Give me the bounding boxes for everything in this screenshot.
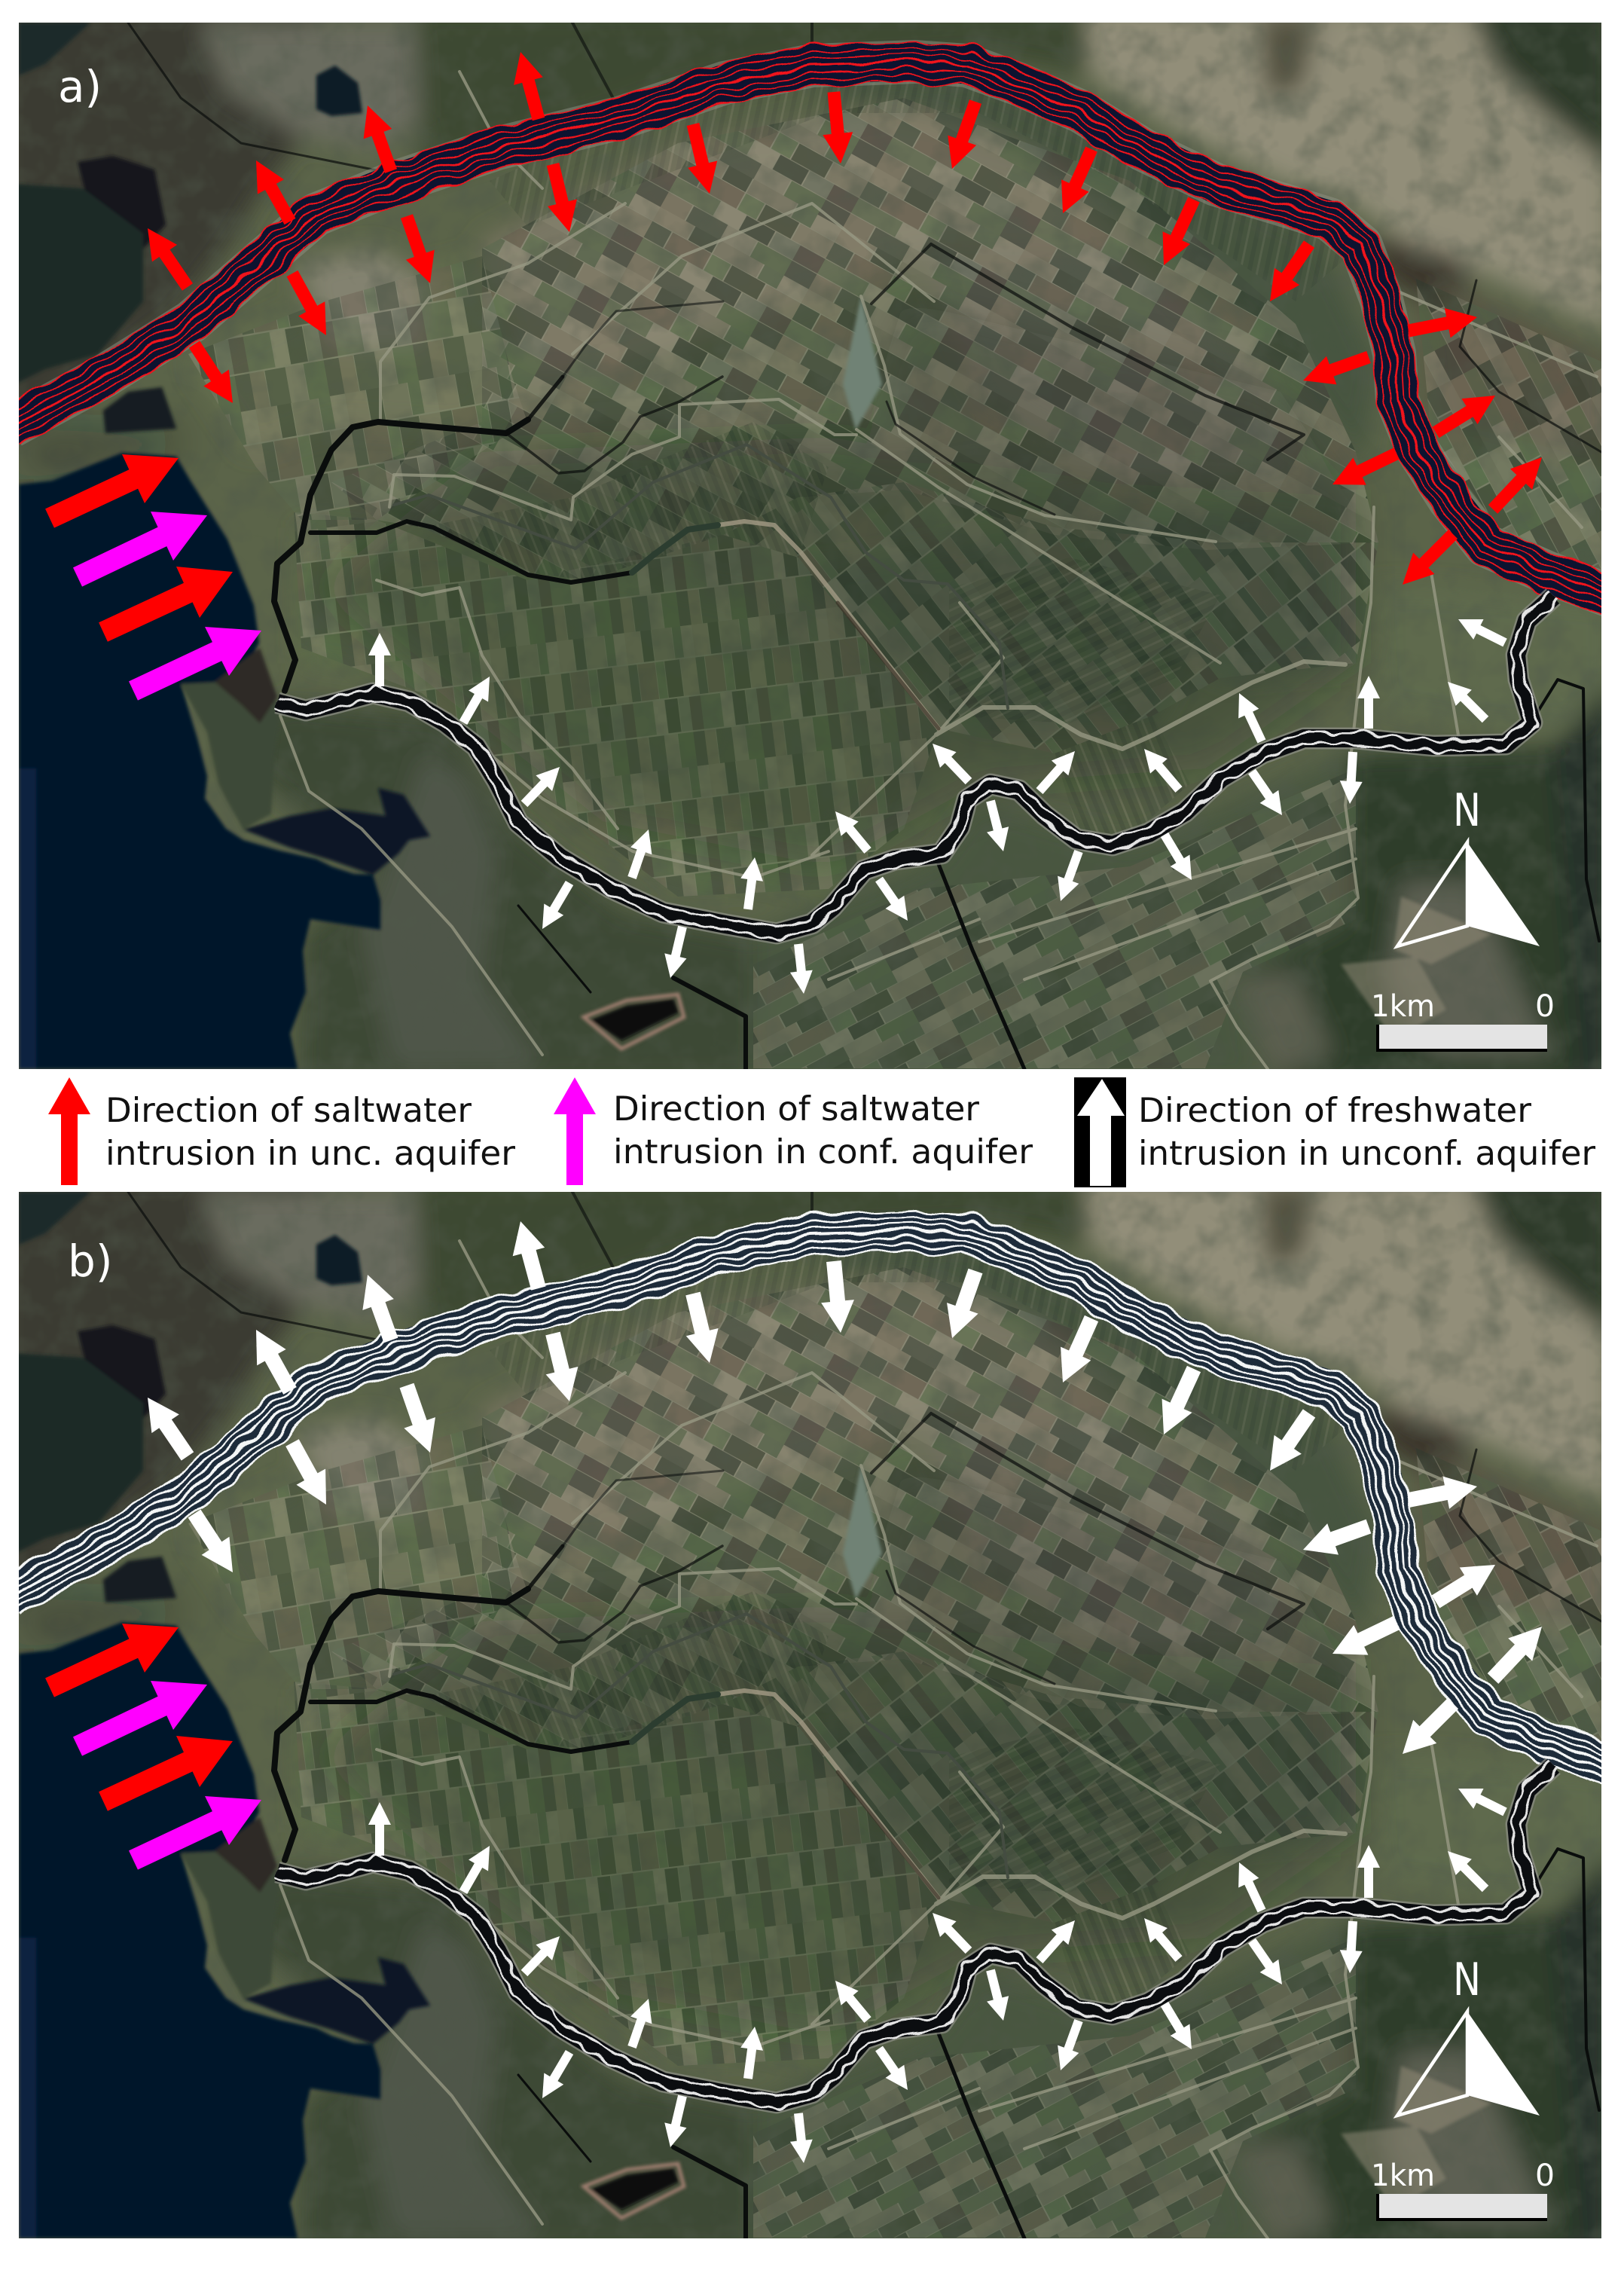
panel a: satellite map with saltwater canal [0,8,1612,1085]
text: saltwater confined: intrusion in conf. aquifer [613,1133,1033,1172]
legend item: saltwater confined [554,1077,1033,1185]
red saltwater arrows along the canal [148,52,1542,585]
satellite base map a [0,8,1612,1085]
freshwater canal north (white waves) [11,1231,1612,1766]
large coastal saltwater arrows [50,454,261,691]
north arrow [1397,1954,1540,2116]
icon: white arrow on black [1074,1077,1126,1187]
text: freshwater unconfined: Direction of freshwater [1138,1092,1532,1130]
large coastal saltwater arrows [50,1624,261,1860]
freshwater canal south (white waves) [277,1766,1553,2103]
north arrow [1397,784,1540,946]
icon: red arrow [48,1077,90,1185]
icon: magenta arrow [554,1077,596,1185]
freshwater canal south (white waves) [277,597,1553,933]
white freshwater arrows along the south canal [380,619,1505,994]
legend [48,1077,1596,1187]
text: saltwater unconfined: Direction of saltwater [105,1092,472,1130]
white freshwater arrows along the north canal [148,1221,1542,1754]
panel label a: a) [58,61,102,112]
text: freshwater unconfined: intrusion in unconf. aquifer [1138,1135,1596,1173]
panel label b: b) [68,1236,112,1287]
white freshwater arrows along the south canal [380,1789,1505,2163]
legend item: freshwater unconfined [1074,1077,1596,1187]
panel b: satellite map with freshwater canal [0,1177,1612,2254]
text: saltwater unconfined: intrusion in unc. aquifer [105,1135,516,1173]
saltwater canal (red waves) [11,62,1612,597]
legend item: saltwater unconfined [48,1077,516,1185]
satellite base map b [0,1177,1612,2254]
scale bar [1371,2158,1555,2221]
text: saltwater confined: Direction of saltwater [613,1090,980,1129]
scale bar [1371,989,1555,1052]
